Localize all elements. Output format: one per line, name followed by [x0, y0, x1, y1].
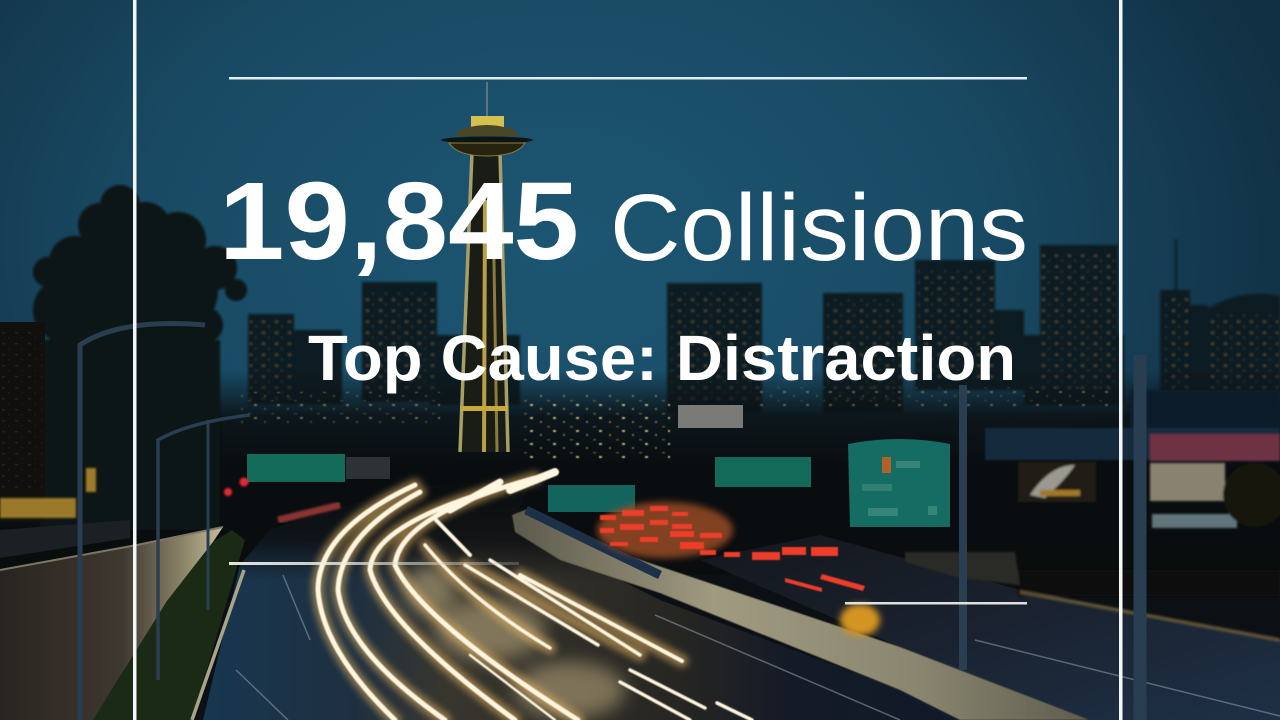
green sign right [715, 457, 811, 487]
building towers [248, 240, 1280, 413]
tail light glow [597, 502, 733, 558]
bottom horizontal rule segments [229, 562, 1027, 604]
gray sign [678, 405, 743, 428]
tower dark interior [460, 152, 508, 452]
vertical frame lines [133, 0, 1122, 720]
figure 19,845: 19,845 [219, 160, 579, 283]
road lane markings [236, 575, 1280, 720]
dark mid-ground city band [0, 370, 1280, 580]
wet road reflection [405, 565, 625, 718]
left building [0, 322, 96, 522]
subheading: top cause: Top Cause: Distraction [308, 322, 1016, 394]
gray sign distant [346, 457, 390, 479]
trail glow [318, 478, 682, 720]
white headlight trails [318, 472, 752, 720]
main road surface [203, 480, 960, 720]
top horizontal rule [229, 77, 1027, 80]
green sign left [247, 454, 345, 482]
left retaining wall and railing [0, 520, 223, 720]
space needle tower [441, 82, 533, 452]
word Collisions: Collisions [610, 175, 1028, 281]
city skyline [248, 240, 1280, 413]
right carriageway [700, 535, 1280, 720]
traffic signals [224, 478, 248, 496]
road left edge line [192, 570, 244, 720]
red smear distant [278, 505, 340, 520]
tower legs [460, 152, 472, 452]
blue rail on barrier [526, 510, 660, 575]
headline: collisions count [219, 160, 1028, 283]
dark tree at left [33, 185, 247, 530]
tower saucer top [471, 116, 504, 127]
street lamps and poles [80, 324, 1140, 720]
concrete median barrier [512, 508, 1090, 720]
right side overpass and storefront [905, 390, 1280, 642]
dark ground beneath roads [0, 575, 1280, 720]
red tail lights [597, 502, 865, 592]
grass verge [93, 530, 245, 720]
green sign centre [548, 485, 635, 512]
road dark far end [240, 480, 620, 580]
large green exit sign [848, 439, 950, 527]
highway signs [247, 405, 950, 527]
orange pavement reflection [840, 604, 880, 636]
trail highlights [318, 472, 752, 720]
building windows [250, 252, 1278, 402]
lower city lights [240, 385, 1110, 460]
